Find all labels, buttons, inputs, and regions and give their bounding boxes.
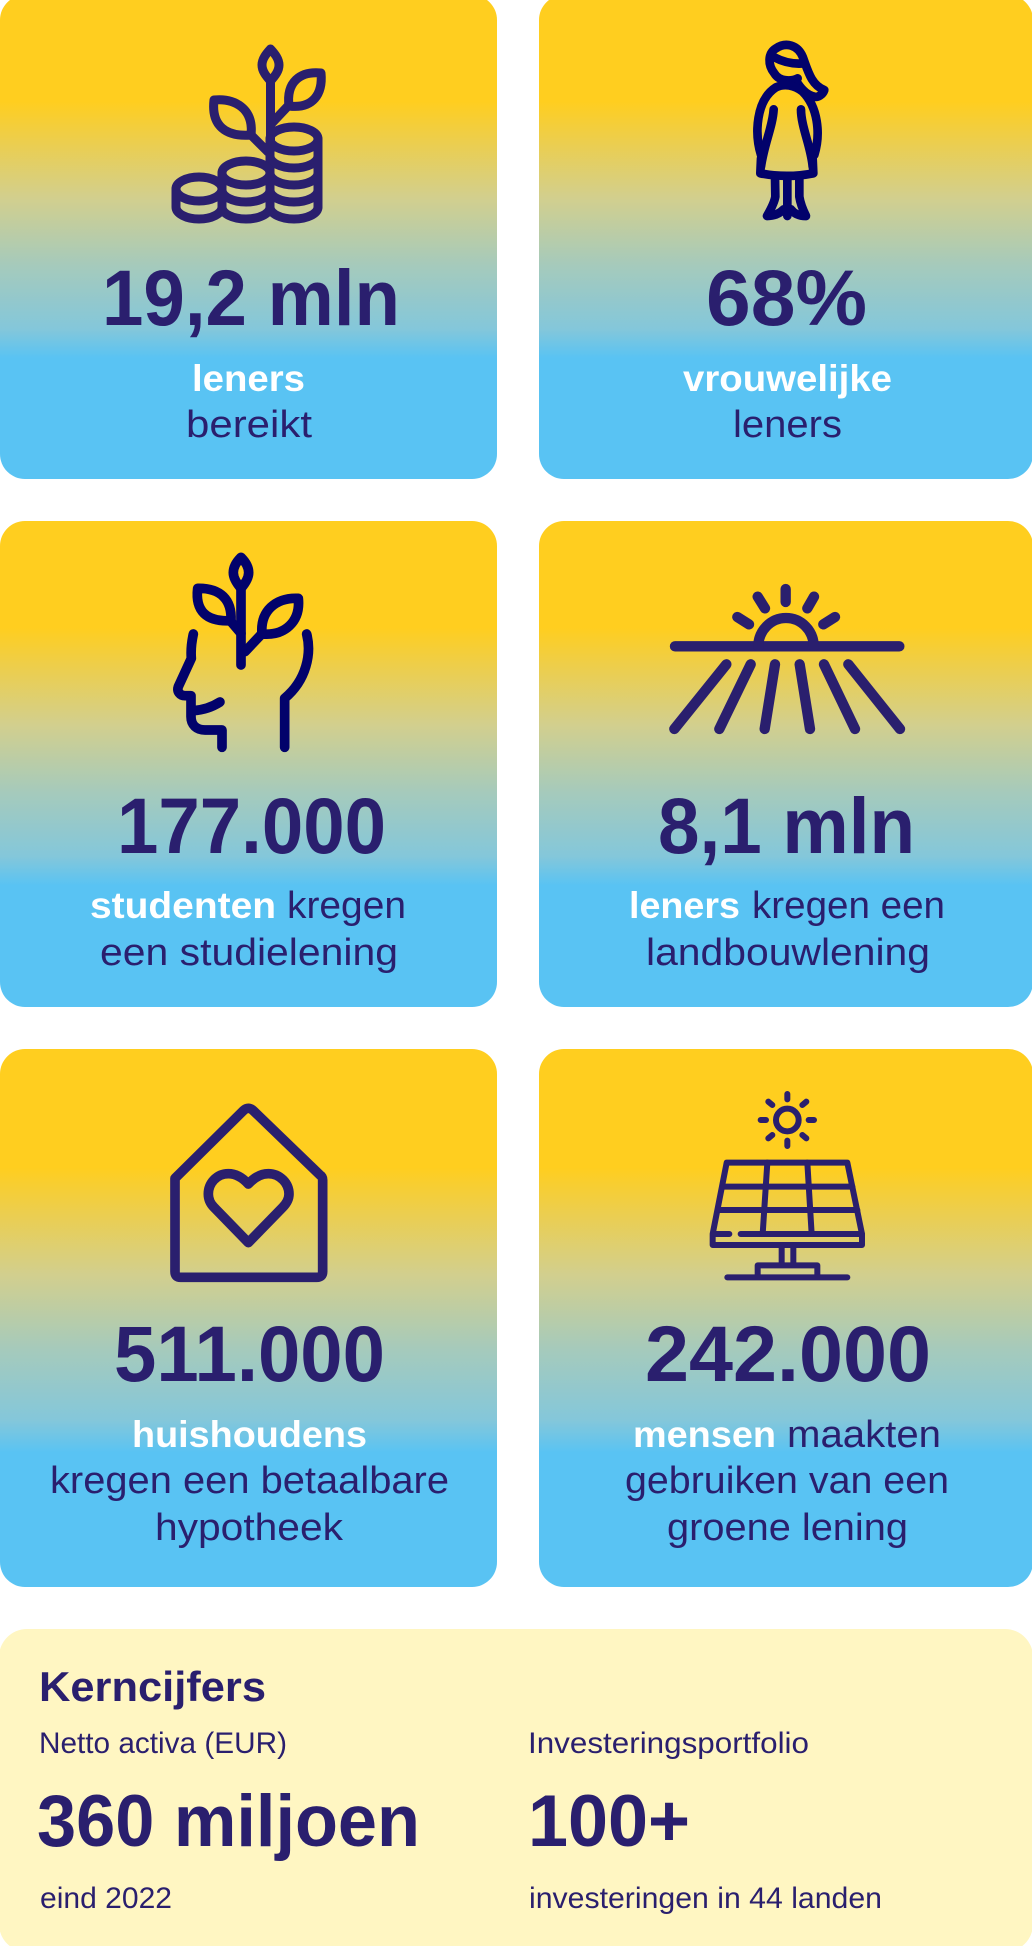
- figure: 100+: [528, 1781, 690, 1862]
- column: investeringsportfolio: [528, 1727, 882, 1915]
- label line 2: een studielening: [100, 932, 398, 974]
- card background: [0, 521, 497, 1007]
- figure: 511.000: [114, 1309, 385, 1398]
- figure: 360 miljoen: [37, 1781, 420, 1862]
- card background: [539, 521, 1032, 1007]
- label: Netto activa (EUR): [39, 1727, 287, 1760]
- label regular: bereikt: [186, 404, 312, 446]
- label line 3: hypotheek: [155, 1507, 344, 1549]
- panel: groene lening: [539, 1049, 1032, 1587]
- figure: 68%: [706, 253, 867, 342]
- label line 1: kregen: [287, 885, 406, 927]
- icon: coins with plant: [176, 49, 321, 219]
- label line 1: studenten: [90, 885, 276, 926]
- card background: [539, 1049, 1032, 1587]
- label line 2: landbouwlening: [646, 932, 930, 974]
- label line 2: kregen een betaalbare: [50, 1460, 449, 1502]
- panel: vrouwelijke leners: [539, 0, 1032, 479]
- label line 1: leners: [629, 885, 740, 926]
- icon: sun over field: [674, 589, 900, 729]
- icon: woman: [757, 45, 824, 216]
- panel: kerncijfers: [0, 1629, 1032, 1946]
- heading: Kerncijfers: [39, 1663, 266, 1710]
- icon: head with plant: [178, 557, 308, 747]
- figure: 19,2 mln: [102, 253, 400, 342]
- panel: landbouwlening: [539, 521, 1032, 1007]
- panel: studenten: [0, 521, 497, 1007]
- label bold: vrouwelijke: [683, 358, 892, 399]
- panel: huishoudens: [0, 1049, 497, 1587]
- figure: 242.000: [645, 1309, 931, 1398]
- note: eind 2022: [40, 1882, 172, 1915]
- panel: leners bereikt: [0, 0, 497, 479]
- card background: [0, 1049, 497, 1587]
- panel background: [0, 1629, 1032, 1946]
- label line 2: gebruiken van een: [625, 1460, 949, 1502]
- label line 1: kregen een: [752, 885, 945, 927]
- label bold: huishoudens: [132, 1414, 367, 1455]
- card background: [0, 0, 497, 479]
- label: Investeringsportfolio: [528, 1727, 809, 1760]
- icon: house with heart: [175, 1108, 323, 1277]
- figure: 177.000: [117, 781, 386, 870]
- label line 1: mensen: [633, 1414, 776, 1455]
- label regular: leners: [733, 404, 842, 446]
- label line 1: [90, 885, 406, 927]
- label line 3: groene lening: [667, 1507, 908, 1549]
- figure: 8,1 mln: [658, 781, 915, 870]
- label line 1: [633, 1414, 941, 1456]
- label line 1: maakten: [787, 1414, 941, 1456]
- label line 1: [629, 885, 945, 927]
- card background: [539, 0, 1032, 479]
- column: netto activa: [37, 1727, 420, 1915]
- note: investeringen in 44 landen: [529, 1882, 882, 1915]
- label bold: leners: [192, 358, 305, 399]
- icon: solar panel with sun: [713, 1094, 862, 1277]
